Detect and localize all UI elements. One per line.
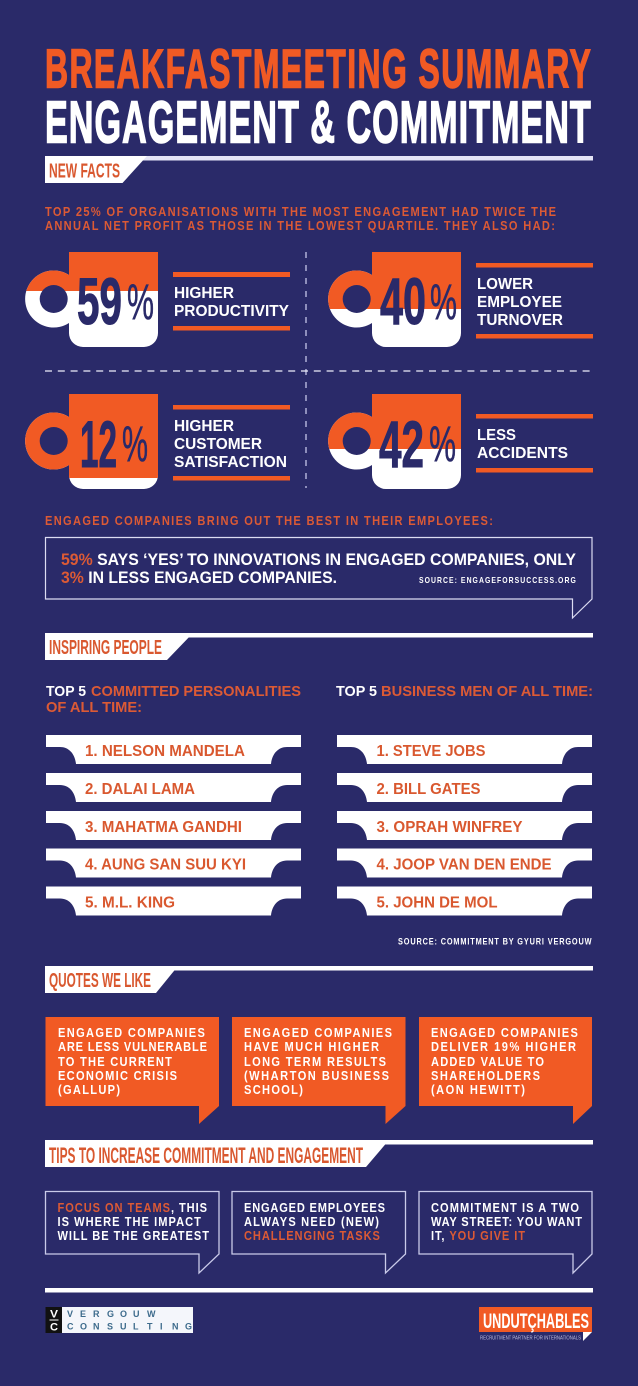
stat: 59% higher productivity: PRODUCTIVITY bbox=[174, 303, 290, 320]
icon: mug 40%: 40 bbox=[380, 264, 426, 338]
stat: 40% lower employee turnover: TURNOVER bbox=[477, 312, 563, 329]
tip: challenging tasks: CHALLENGING TASKS bbox=[244, 1228, 380, 1243]
tip: challenging tasks: ALWAYS NEED (NEW) bbox=[244, 1214, 379, 1229]
tip: focus on teams: WILL BE THE GREATEST bbox=[58, 1228, 210, 1243]
title: ENGAGEMENT & COMMITMENT bbox=[45, 90, 591, 156]
logo: vergouw consulting: V bbox=[50, 1308, 59, 1320]
quote: wharton: ENGAGED COMPANIES bbox=[244, 1025, 392, 1040]
icon: mug 12%: % bbox=[122, 416, 148, 472]
logo: vergouw consulting: CONSULTING bbox=[67, 1322, 192, 1332]
icon: mug 40% bbox=[328, 252, 461, 347]
section heading: inspiring people bbox=[45, 633, 593, 660]
callout: innovations: 3% IN LESS ENGAGED COMPANIES. bbox=[61, 569, 337, 587]
quote: gallup: ENGAGED COMPANIES bbox=[58, 1025, 205, 1040]
list: committed personalities: 5. M.L. KING bbox=[85, 894, 175, 912]
list: business men bbox=[337, 735, 592, 916]
list: business men: 2. BILL GATES bbox=[376, 781, 480, 798]
column heading: committed personalities: TOP 5 bbox=[46, 683, 86, 700]
list: committed personalities: 4. AUNG SAN SUU KYI bbox=[85, 856, 246, 874]
stat: 42% less accidents bbox=[328, 394, 593, 489]
tip: focus on teams bbox=[46, 1192, 219, 1273]
stat: 42% less accidents: ACCIDENTS bbox=[477, 445, 568, 462]
column heading: business men: BUSINESS MEN OF ALL TIME: bbox=[381, 683, 593, 700]
callout: innovations: SOURCE: ENGAGEFORSUCCESS.ORG bbox=[419, 575, 576, 585]
stat: 12% higher customer satisfaction: CUSTOMER bbox=[174, 436, 262, 453]
stat: 40% lower employee turnover bbox=[328, 252, 593, 347]
icon: mug 59% bbox=[25, 252, 158, 347]
icon: mug 42% bbox=[328, 394, 461, 489]
quote: wharton: SCHOOL) bbox=[244, 1082, 303, 1097]
quote: gallup: (GALLUP) bbox=[58, 1082, 120, 1097]
stat: 12% higher customer satisfaction: SATISFACTION bbox=[174, 454, 287, 471]
quote: aon hewitt: SHAREHOLDERS bbox=[431, 1068, 540, 1083]
icon: mug 42%: 42 bbox=[379, 407, 424, 481]
stat: 40% lower employee turnover: EMPLOYEE bbox=[477, 294, 562, 311]
callout: innovations bbox=[46, 538, 592, 618]
icon: mug 42%: % bbox=[429, 416, 456, 472]
list: committed personalities: 1. NELSON MANDELA bbox=[85, 743, 245, 760]
quote: wharton: LONG TERM RESULTS bbox=[244, 1054, 386, 1069]
tip: two way street: WAY STREET: YOU WANT bbox=[431, 1214, 583, 1229]
tip: challenging tasks bbox=[232, 1192, 406, 1273]
list: committed personalities: 3. MAHATMA GANDHI bbox=[85, 819, 242, 836]
tip: focus on teams: FOCUS ON TEAMS, THIS bbox=[58, 1200, 207, 1215]
section heading: quotes we like: QUOTES WE LIKE bbox=[49, 970, 151, 992]
list: business men: 3. OPRAH WINFREY bbox=[376, 819, 523, 836]
stat: 59% higher productivity bbox=[25, 252, 290, 347]
stat: 12% higher customer satisfaction: HIGHER bbox=[174, 418, 234, 435]
source note: SOURCE: COMMITMENT BY GYURI VERGOUW bbox=[398, 936, 592, 947]
quote: aon hewitt bbox=[419, 1017, 592, 1124]
icon: mug 12%: 12 bbox=[80, 407, 117, 481]
quote: gallup: TO THE CURRENT bbox=[58, 1054, 173, 1069]
section heading: new facts bbox=[45, 156, 593, 183]
logo: vergouw consulting: C bbox=[50, 1322, 58, 1334]
section heading: quotes we like bbox=[45, 966, 593, 993]
tip: two way street bbox=[419, 1192, 592, 1273]
quote: aon hewitt: ADDED VALUE TO bbox=[431, 1054, 544, 1069]
title: BREAKFASTMEETING SUMMARY bbox=[45, 37, 591, 100]
quote: gallup: ARE LESS VULNERABLE bbox=[58, 1039, 207, 1054]
logo: undutchables bbox=[479, 1307, 592, 1342]
quote: wharton bbox=[232, 1017, 406, 1124]
stat: 59% higher productivity: HIGHER bbox=[174, 285, 234, 302]
intro text: ANNUAL NET PROFIT AS THOSE IN THE LOWEST QUARTILE. THEY ALSO HAD: bbox=[45, 218, 555, 233]
icon: mug 59%: 59 bbox=[77, 264, 122, 338]
section heading: new facts: NEW FACTS bbox=[49, 160, 120, 182]
column heading: committed personalities: OF ALL TIME: bbox=[46, 699, 142, 716]
list: business men: 5. JOHN DE MOL bbox=[376, 894, 498, 912]
quote: gallup bbox=[46, 1017, 219, 1124]
intro text: TOP 25% OF ORGANISATIONS WITH THE MOST ENGAGEMENT HAD TWICE THE bbox=[45, 204, 556, 219]
quote: aon hewitt: (AON HEWITT) bbox=[431, 1082, 525, 1097]
stat: 12% higher customer satisfaction bbox=[25, 394, 290, 489]
title bbox=[45, 37, 591, 156]
column heading: committed personalities bbox=[46, 683, 301, 716]
list: business men: 1. STEVE JOBS bbox=[376, 743, 486, 760]
column heading: committed personalities: COMMITTED PERSONALITIES bbox=[91, 683, 301, 700]
tip: two way street: COMMITMENT IS A TWO bbox=[431, 1200, 579, 1215]
column heading: business men: TOP 5 bbox=[336, 683, 377, 700]
quote: gallup: ECONOMIC CRISIS bbox=[58, 1068, 177, 1083]
logo: vergouw consulting: VERGOUW bbox=[67, 1309, 156, 1319]
logo: undutchables: RECRUITMENT PARTNER FOR INTERNATIONALS bbox=[480, 1336, 581, 1342]
tip: challenging tasks: ENGAGED EMPLOYEES bbox=[244, 1200, 385, 1215]
list: committed personalities bbox=[46, 735, 301, 916]
icon: mug 40%: % bbox=[430, 274, 457, 330]
stat: 42% less accidents: LESS bbox=[477, 427, 516, 444]
stat: 40% lower employee turnover: LOWER bbox=[477, 276, 533, 293]
tip: focus on teams: IS WHERE THE IMPACT bbox=[58, 1214, 202, 1229]
callout: innovations: 59% SAYS ‘YES’ TO INNOVATIONS IN ENGAGED COMPANIES, ONLY bbox=[61, 551, 576, 569]
section heading: inspiring people: INSPIRING PEOPLE bbox=[49, 637, 162, 659]
quote: wharton: HAVE MUCH HIGHER bbox=[244, 1039, 379, 1054]
quote: aon hewitt: ENGAGED COMPANIES bbox=[431, 1025, 578, 1040]
section heading: tips: TIPS TO INCREASE COMMITMENT AND ENGAGEMENT bbox=[49, 1143, 363, 1168]
subheading: engaged companies: ENGAGED COMPANIES BRING OUT THE BEST IN THEIR EMPLOYEES: bbox=[45, 513, 493, 528]
quote: aon hewitt: DELIVER 19% HIGHER bbox=[431, 1039, 576, 1054]
intro text bbox=[45, 204, 556, 233]
list: business men: 4. JOOP VAN DEN ENDE bbox=[376, 856, 552, 874]
list: committed personalities: 2. DALAI LAMA bbox=[85, 781, 195, 798]
tip: two way street: IT, YOU GIVE IT bbox=[431, 1228, 526, 1243]
icon: mug 59%: % bbox=[127, 274, 154, 330]
logo: vergouw consulting bbox=[46, 1307, 193, 1334]
quote: wharton: (WHARTON BUSINESS bbox=[244, 1068, 389, 1083]
icon: mug 12% bbox=[25, 394, 158, 489]
